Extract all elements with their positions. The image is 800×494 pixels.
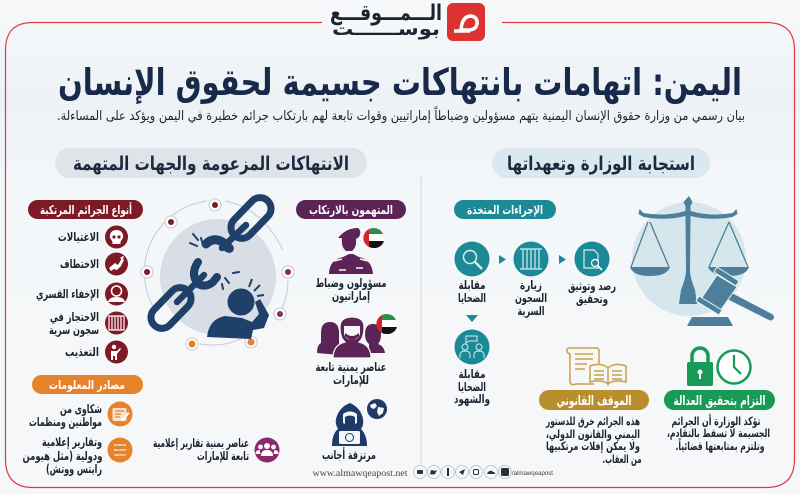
- sources heading: مصادر المعلومات: [49, 378, 125, 393]
- crime: torture: التعذيب: [65, 345, 99, 359]
- source: media reports: WATCH: [114, 453, 126, 457]
- source: Yemeni elements: عناصر يمنية تقارير إعلامية: [153, 436, 249, 450]
- panel: information sources: [22, 375, 280, 477]
- accused heading: [296, 200, 406, 219]
- source: media reports: رايتس ووتش): [46, 462, 102, 477]
- sources heading: [32, 375, 143, 394]
- step: prison visits: السرية: [518, 304, 544, 318]
- accused: Yemeni elements: عناصر يمنية تابعة: [316, 360, 386, 374]
- heading: violations: الانتهاكات المزعومة والجهات المتهمة: [73, 153, 349, 175]
- source: media reports: RIGHTS: [114, 448, 126, 452]
- chain links: [146, 193, 276, 333]
- panel: actions taken: [454, 200, 616, 407]
- crime types heading: أنواع الجرائم المرتكبة: [40, 202, 132, 218]
- arrow: [499, 255, 506, 264]
- crime: secret prisons: سجون سرية: [49, 323, 99, 338]
- heading: ministry response: استجابة الوزارة وتعهداتها: [507, 153, 695, 175]
- break sparks: [190, 234, 239, 289]
- accused: officers: إماراتيون: [332, 289, 370, 304]
- crime: secret prisons: [49, 310, 128, 338]
- logo: الـــمـــوقـــع: [330, 1, 442, 26]
- panel: legal position: ولا يمكن إفلات مرتكبيها: [546, 439, 640, 454]
- crime: abduction: الاختطاف: [60, 257, 99, 271]
- accused: officers: مسؤولون وضباط: [316, 276, 386, 291]
- step: documentation: [568, 242, 616, 307]
- icon: lock and clock: [687, 348, 750, 386]
- panel: legal position: [539, 348, 649, 466]
- crime: enforced disappearance: [36, 282, 128, 306]
- icon: scroll and book: [567, 348, 626, 385]
- orbit dots: [141, 199, 294, 350]
- logo: [330, 1, 485, 41]
- step: documentation: وتحقيق: [576, 292, 608, 307]
- heading: violations: [55, 148, 367, 178]
- icon: globe: [367, 399, 387, 419]
- icon: UAE flag: [363, 228, 384, 248]
- source: media reports: وتقارير إعلامية: [42, 435, 102, 450]
- step: prison visits: السجون: [515, 291, 547, 306]
- footer social icons: /almawqeapost: [512, 470, 553, 477]
- accused: Yemeni elements: [316, 314, 397, 387]
- source: Yemeni elements: [153, 436, 280, 463]
- crime: abduction: [60, 252, 128, 276]
- actions heading: الإجراءات المتخذة: [467, 203, 543, 217]
- accused: foreign mercenaries: مرتزقة أجانب: [322, 447, 376, 462]
- crime: assassinations: [58, 226, 128, 248]
- logo: بوســــــت: [332, 19, 440, 40]
- source: media reports: HUMAN: [114, 443, 127, 447]
- panel: legal position: من العقاب.: [602, 452, 642, 466]
- accused: Yemeni elements: للإمارات: [333, 373, 369, 387]
- panel: accused: [296, 200, 406, 462]
- source: media reports: [22, 435, 132, 477]
- arrow: [559, 255, 566, 264]
- panel: commitment to justice: [664, 348, 775, 454]
- accused: officers: [316, 228, 386, 304]
- heading: ministry response: [492, 148, 710, 178]
- footer social icons: [414, 466, 553, 478]
- distressed figure: [207, 279, 269, 339]
- panel: legal position: الموقف القانوني: [556, 394, 632, 409]
- panel: crime types: [28, 200, 143, 364]
- source: complaints: [29, 402, 132, 430]
- accused: foreign mercenaries: [322, 399, 387, 462]
- step: documentation: رصد وتوثيق: [568, 279, 616, 294]
- source: complaints: مواطنين ومنظمات: [29, 415, 102, 430]
- icon: scales and gavel: [630, 196, 774, 326]
- step: prison visits: زيارة: [520, 278, 542, 292]
- crime: assassinations: الاغتيالات: [58, 230, 99, 244]
- source: complaints: شكاوى من: [60, 402, 102, 417]
- step: victim interviews: مقابلة: [458, 278, 486, 292]
- step: witnesses: [454, 330, 490, 407]
- icon: UAE flag: [376, 314, 397, 334]
- panel: legal position: اليمني والقانون الدولي،: [546, 427, 640, 442]
- step: witnesses: والشهود: [454, 392, 490, 407]
- arrow: [466, 315, 478, 322]
- step: victim interviews: [454, 242, 490, 305]
- crime: enforced disappearance: الإخفاء القسري: [36, 287, 99, 301]
- crime: torture: [65, 340, 128, 364]
- gavel: [696, 267, 774, 321]
- panel: commitment to justice: تؤكد الوزارة أن الجرائم: [672, 413, 760, 429]
- crime: secret prisons: الاحتجاز في: [50, 310, 99, 324]
- crime types heading: [28, 200, 143, 219]
- step: victim interviews: الضحايا: [458, 291, 486, 305]
- accused heading: المتهمون بالارتكاب: [309, 203, 393, 218]
- panel: legal position: هذه الجرائم خرق للدستور: [545, 414, 640, 429]
- footer website: www.almawqeapost.net: [312, 469, 408, 479]
- chain illustration: [141, 193, 294, 350]
- source: media reports: ودولية (مثل هيومن: [22, 449, 102, 464]
- source: Yemeni elements: تابعة للإمارات: [197, 449, 249, 463]
- step: witnesses: الضحايا: [458, 380, 486, 394]
- actions heading: [454, 200, 556, 219]
- step: prison visits: [514, 242, 548, 318]
- step: witnesses: مقابلة: [458, 367, 486, 381]
